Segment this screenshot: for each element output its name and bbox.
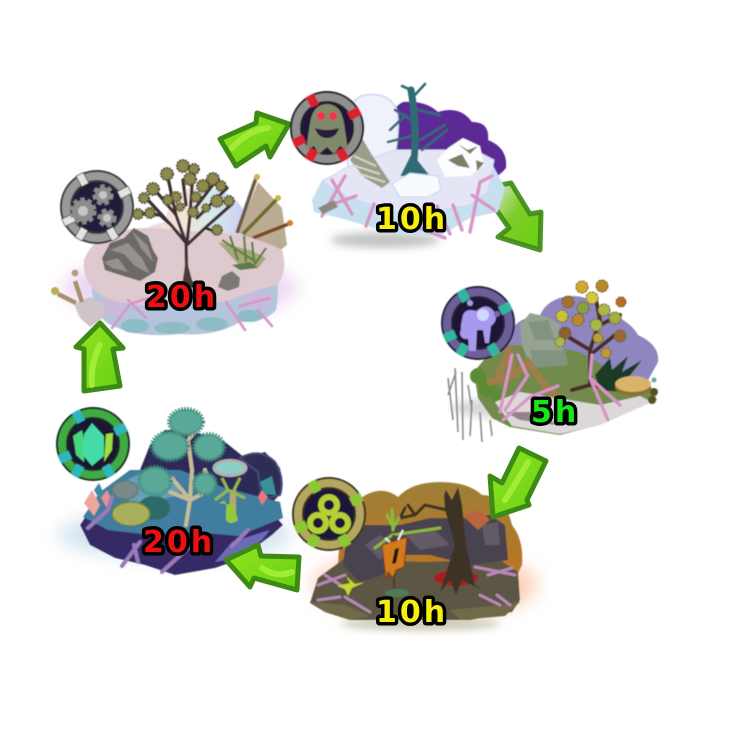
- slime highlight: [477, 309, 489, 321]
- grass ground: [474, 345, 657, 435]
- time label: 5h swamp: 5h: [531, 395, 579, 430]
- crystal icon: [73, 423, 113, 466]
- tree stump: [615, 376, 658, 404]
- slime icon: [460, 300, 500, 351]
- Joshua tree: [133, 160, 234, 288]
- blue water floor: [83, 470, 283, 536]
- island: swamp: [448, 280, 658, 442]
- lavender cloud: [505, 296, 658, 395]
- time label: 10h snow: 10h: [376, 202, 448, 237]
- pink sand ground: [84, 228, 284, 306]
- arrow: snow to swamp: [493, 183, 541, 250]
- holographic sky behind tree: [128, 187, 247, 260]
- snow ground: [322, 150, 494, 212]
- time label: 20h desert: 20h: [146, 280, 218, 315]
- snowy rock: [437, 138, 484, 177]
- snow dome: [345, 95, 398, 175]
- teal clamps: [443, 288, 513, 357]
- ghost icon: [306, 104, 348, 154]
- pink coral branches: [88, 497, 248, 572]
- gear icons: [72, 187, 114, 225]
- hanging roots: [448, 368, 548, 442]
- banner with music note: [382, 530, 409, 597]
- dark ground: [310, 558, 520, 620]
- yellow crack: [337, 576, 365, 596]
- tree: [388, 84, 447, 175]
- snow mound: [392, 173, 441, 197]
- mossy rock: [520, 313, 568, 368]
- red clamps: [292, 93, 362, 162]
- green clamps: [294, 479, 364, 548]
- fern bush: [595, 356, 642, 392]
- vine totem: [375, 510, 440, 548]
- pink veins: [318, 567, 515, 612]
- badge: ghost: [290, 91, 364, 165]
- island underside: [80, 500, 283, 575]
- striped rock: [350, 138, 390, 188]
- island: desert with Joshua tree: [51, 160, 298, 335]
- purple cloud: [384, 102, 506, 185]
- orange glow: [313, 551, 537, 619]
- crystals: [84, 476, 276, 516]
- pink coral branches: [500, 355, 620, 420]
- bushes on left edge: [470, 368, 505, 403]
- floating rock and pipes: [51, 270, 105, 327]
- badge: crystal: [56, 407, 130, 481]
- gnarled roots: [490, 345, 555, 395]
- pink coral branches: [322, 176, 494, 238]
- orange-brown cloud: [338, 482, 522, 590]
- arrow: volcanic to reef: [226, 545, 299, 590]
- dark purple background reef: [135, 430, 282, 505]
- blue glow: [57, 511, 293, 559]
- time label: 10h volcanic: 10h: [376, 595, 448, 630]
- arrow: swamp to volcanic: [490, 448, 546, 517]
- island: snow: [312, 84, 506, 248]
- fossil plant: [218, 236, 266, 270]
- boulder: [102, 228, 158, 281]
- ice base: [312, 160, 505, 236]
- sail and pipes: [237, 174, 293, 252]
- small rock: [218, 271, 240, 291]
- small snow patch: [318, 200, 338, 214]
- badge: gears: [60, 170, 134, 244]
- red lava: [434, 570, 478, 586]
- coral bush: [112, 481, 170, 526]
- time label: 20h reef: 20h: [143, 525, 215, 560]
- arrow: up to desert: [76, 323, 123, 391]
- cloud base: [92, 270, 278, 335]
- ground shadow: [340, 618, 500, 630]
- badge: biohazard: [292, 477, 366, 551]
- shadow below snow island: [330, 232, 440, 248]
- yellow-leaf tree: [555, 280, 626, 390]
- earth patch: [505, 412, 555, 425]
- coral tree: [139, 409, 224, 525]
- fountain pedestal: [214, 460, 246, 523]
- ring clamps: [62, 172, 132, 241]
- purple rocks: [343, 510, 508, 582]
- dead tree: [400, 487, 482, 595]
- pink roots: [112, 298, 272, 330]
- badge: slime: [441, 286, 515, 360]
- underside mist band: [495, 392, 652, 434]
- island: volcanic: [310, 482, 537, 630]
- teal clamps: [58, 409, 128, 478]
- island: reef: [57, 409, 293, 575]
- purple glow behind desert island: [62, 258, 298, 318]
- biohazard icon: [310, 497, 348, 531]
- arrow: desert to snow: [220, 113, 289, 166]
